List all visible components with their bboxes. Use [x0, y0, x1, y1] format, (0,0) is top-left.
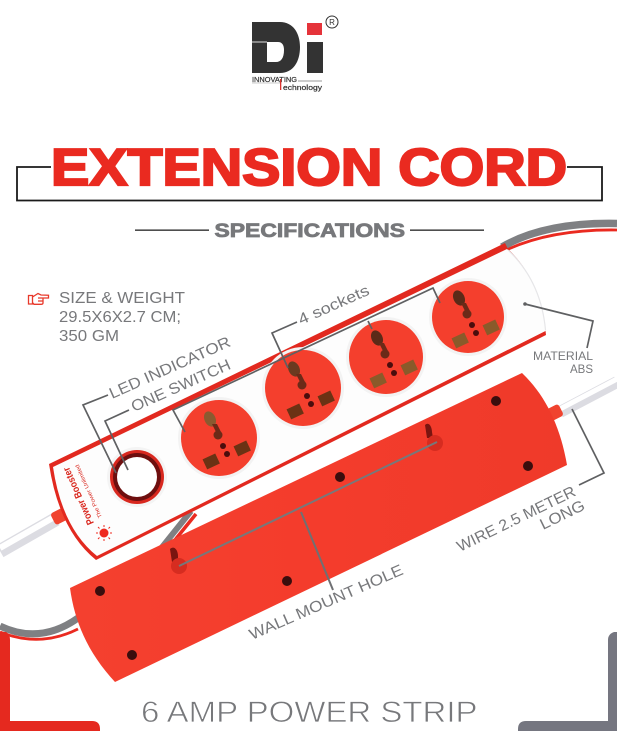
size and weight text: 29.5X6X2.7 CM; [59, 309, 181, 326]
wire ribbon bottom left [0, 618, 78, 639]
size and weight text [59, 290, 186, 345]
panel: strip front view [49, 243, 546, 560]
label: wall mount hole: WALL MOUNT HOLE [247, 562, 406, 644]
label: 4 sockets: 4 sockets [296, 282, 372, 329]
socket 4 [429, 278, 507, 356]
size and weight text: 350 GM [59, 328, 119, 345]
footer caption: 6 AMP POWER STRIP [141, 696, 477, 729]
label: material abs [523, 302, 594, 376]
wire ribbon between strips [155, 511, 196, 556]
logo tagline [252, 77, 322, 92]
panel: strip rear view [70, 373, 567, 682]
socket 3 [346, 317, 426, 397]
label: wall mount hole [179, 442, 437, 644]
label: material abs: MATERIAL [533, 351, 594, 363]
specifications heading: SPECIFICATIONS [214, 221, 405, 242]
label: wire length: WIRE 2.5 METER [454, 483, 579, 556]
label: wire length [454, 409, 604, 556]
title: EXTENSION CORD [51, 139, 567, 197]
logo [252, 16, 338, 92]
logo tagline: INNOVATING [252, 77, 297, 84]
logo slit [252, 42, 267, 43]
title frame [17, 167, 602, 200]
size and weight text: SIZE & WEIGHT [59, 290, 186, 307]
label: 4 sockets [173, 282, 440, 432]
logo tagline: echnology [283, 83, 322, 92]
corner bracket red [0, 632, 100, 731]
power cord left [0, 507, 68, 551]
label: material abs: ABS [570, 364, 593, 376]
switch [107, 447, 167, 507]
label: one switch: ONE SWITCH [129, 357, 233, 416]
icon: led sun [96, 525, 112, 541]
icon: pointing hand [28, 294, 48, 304]
logo letter D [252, 22, 300, 73]
socket 1 [178, 397, 260, 479]
brand text: The Power Unlimited [75, 463, 104, 519]
label: led indicator: LED INDICATOR [107, 334, 233, 403]
socket 2 [262, 347, 344, 429]
brand text: Power Booster [61, 465, 97, 526]
label: wire length: LONG [537, 497, 588, 534]
wire ribbon top right [502, 223, 617, 250]
power cord right [546, 379, 617, 422]
keyhole right [425, 424, 443, 451]
corner bracket gray [518, 632, 617, 731]
keyhole left [170, 548, 187, 574]
rear screws [95, 396, 533, 660]
logo letter i [307, 23, 323, 73]
registered mark: R [329, 18, 335, 27]
label: led indicator [83, 334, 233, 473]
label: one switch [105, 357, 233, 470]
